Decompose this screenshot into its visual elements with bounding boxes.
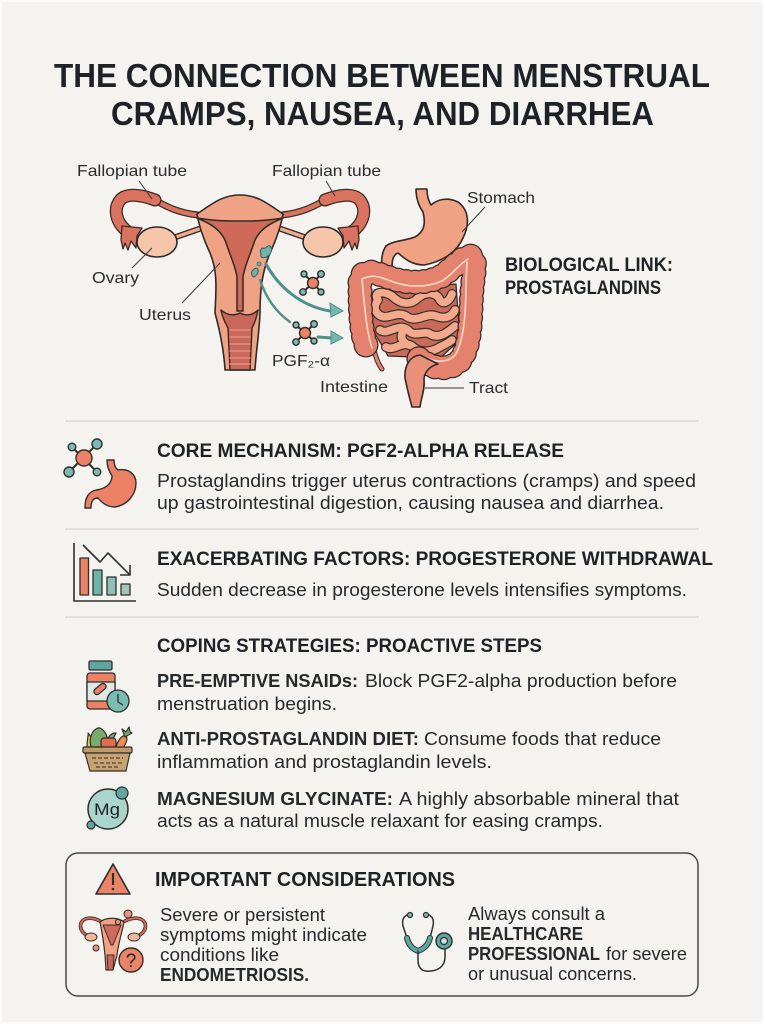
title bbox=[54, 57, 710, 132]
icon: magnesium: Mg bbox=[94, 800, 120, 819]
heading: biological link: PROSTAGLANDINS bbox=[505, 278, 661, 299]
icon: declining bar chart bbox=[74, 543, 136, 601]
text block: endometriosis warning: symptoms might indicate bbox=[160, 925, 367, 945]
text block: consult professional: or unusual concerns. bbox=[468, 964, 637, 984]
text block: core mechanism: up gastrointestinal digestion, causing nausea and diarrhea. bbox=[157, 493, 664, 513]
anatomy labels: Fallopian tube bbox=[272, 163, 381, 180]
small intestine bbox=[370, 284, 460, 358]
text block: pre-emptive nsaids bbox=[157, 671, 677, 714]
text block: pre-emptive nsaids: menstruation begins. bbox=[157, 694, 337, 714]
text block: anti-prostaglandin diet: ANTI-PROSTAGLANDIN DIET: bbox=[157, 729, 419, 749]
illustration: female reproductive system bbox=[116, 195, 364, 370]
text block: endometriosis warning bbox=[160, 905, 367, 985]
anatomy labels: Stomach bbox=[467, 190, 535, 207]
anatomy labels: Fallopian tube bbox=[77, 163, 187, 180]
text block: exacerbating factors: Sudden decrease in progesterone levels intensifies symptoms. bbox=[157, 580, 687, 600]
molecule: upper bbox=[300, 271, 324, 295]
text block: anti-prostaglandin diet: inflammation and prostaglandin levels. bbox=[157, 752, 492, 772]
text block: core mechanism: Prostaglandins trigger uterus contractions (cramps) and speed bbox=[157, 471, 696, 491]
text block: endometriosis warning: ENDOMETRIOSIS. bbox=[160, 965, 309, 985]
pgf2-alpha arrows bbox=[260, 264, 343, 344]
text block: consult professional bbox=[468, 904, 687, 984]
text block: core mechanism: CORE MECHANISM: PGF2-ALPHA RELEASE bbox=[157, 441, 564, 462]
text block: consult professional: Always consult a bbox=[468, 904, 606, 924]
heading: biological link: BIOLOGICAL LINK: bbox=[505, 255, 673, 276]
title: THE CONNECTION BETWEEN MENSTRUAL bbox=[54, 57, 710, 94]
text block: consult professional: HEALTHCARE bbox=[468, 924, 583, 944]
text block: consult professional: PROFESSIONAL bbox=[468, 944, 600, 964]
illustration: stomach bbox=[382, 189, 467, 268]
icon: food basket bbox=[83, 727, 132, 771]
text block: endometriosis warning: Severe or persistent bbox=[160, 905, 325, 925]
anatomy labels: Tract bbox=[469, 380, 509, 397]
prostaglandin patches bbox=[260, 246, 271, 258]
text block: magnesium glycinate bbox=[157, 789, 679, 831]
heading: biological link bbox=[505, 255, 673, 299]
title: CRAMPS, NAUSEA, AND DIARRHEA bbox=[111, 95, 654, 132]
icon: uterus with question mark bbox=[81, 910, 145, 972]
text block: anti-prostaglandin diet bbox=[157, 729, 661, 772]
text block: endometriosis warning: conditions like bbox=[160, 945, 279, 965]
rectum bbox=[405, 355, 438, 407]
anatomy labels: Intestine bbox=[320, 379, 388, 396]
text block: magnesium glycinate: acts as a natural muscle relaxant for easing cramps. bbox=[157, 811, 603, 831]
text block: anti-prostaglandin diet: Consume foods that reduce bbox=[424, 729, 661, 749]
icon: molecule and stomach bbox=[64, 439, 136, 508]
left fallopian tube and ovary bbox=[116, 195, 199, 257]
text block: core mechanism bbox=[157, 441, 696, 513]
anatomy labels bbox=[77, 163, 535, 397]
text block: exacerbating factors: EXACERBATING FACTORS: PROGESTERONE WITHDRAWAL bbox=[157, 549, 713, 570]
text block: pre-emptive nsaids: PRE-EMPTIVE NSAIDs: bbox=[157, 671, 358, 691]
text block: pre-emptive nsaids: Block PGF2-alpha production before bbox=[365, 671, 677, 691]
colon bbox=[360, 256, 474, 368]
uterus body bbox=[197, 195, 283, 370]
text block: consult professional: for severe bbox=[606, 944, 687, 964]
uterine cavity bbox=[197, 218, 283, 311]
vagina canal bbox=[221, 310, 258, 370]
panel: important considerations bbox=[66, 853, 698, 996]
text block: magnesium glycinate: MAGNESIUM GLYCINATE: bbox=[157, 789, 393, 809]
anatomy labels: PGF₂-α bbox=[272, 353, 330, 370]
icon: magnesium bbox=[87, 787, 128, 829]
heading: important considerations: IMPORTANT CONSIDERATIONS bbox=[155, 869, 455, 891]
anatomy labels: Uterus bbox=[139, 307, 191, 324]
text block: exacerbating factors bbox=[157, 549, 713, 600]
anatomy labels: Ovary bbox=[92, 270, 139, 287]
right fallopian tube and ovary bbox=[281, 195, 364, 257]
text block: magnesium glycinate: A highly absorbable mineral that bbox=[399, 789, 679, 809]
icon: warning triangle bbox=[96, 864, 130, 894]
anatomy leader lines bbox=[132, 181, 485, 388]
molecule: lower bbox=[293, 321, 317, 345]
illustration: intestines bbox=[360, 256, 474, 407]
appendix bbox=[374, 350, 382, 369]
icon: stethoscope bbox=[403, 912, 452, 971]
icon: uterus with question mark: ? bbox=[126, 951, 136, 972]
heading: coping strategies: COPING STRATEGIES: PROACTIVE STEPS bbox=[157, 636, 542, 657]
icon: pill bottle and clock bbox=[87, 661, 129, 712]
